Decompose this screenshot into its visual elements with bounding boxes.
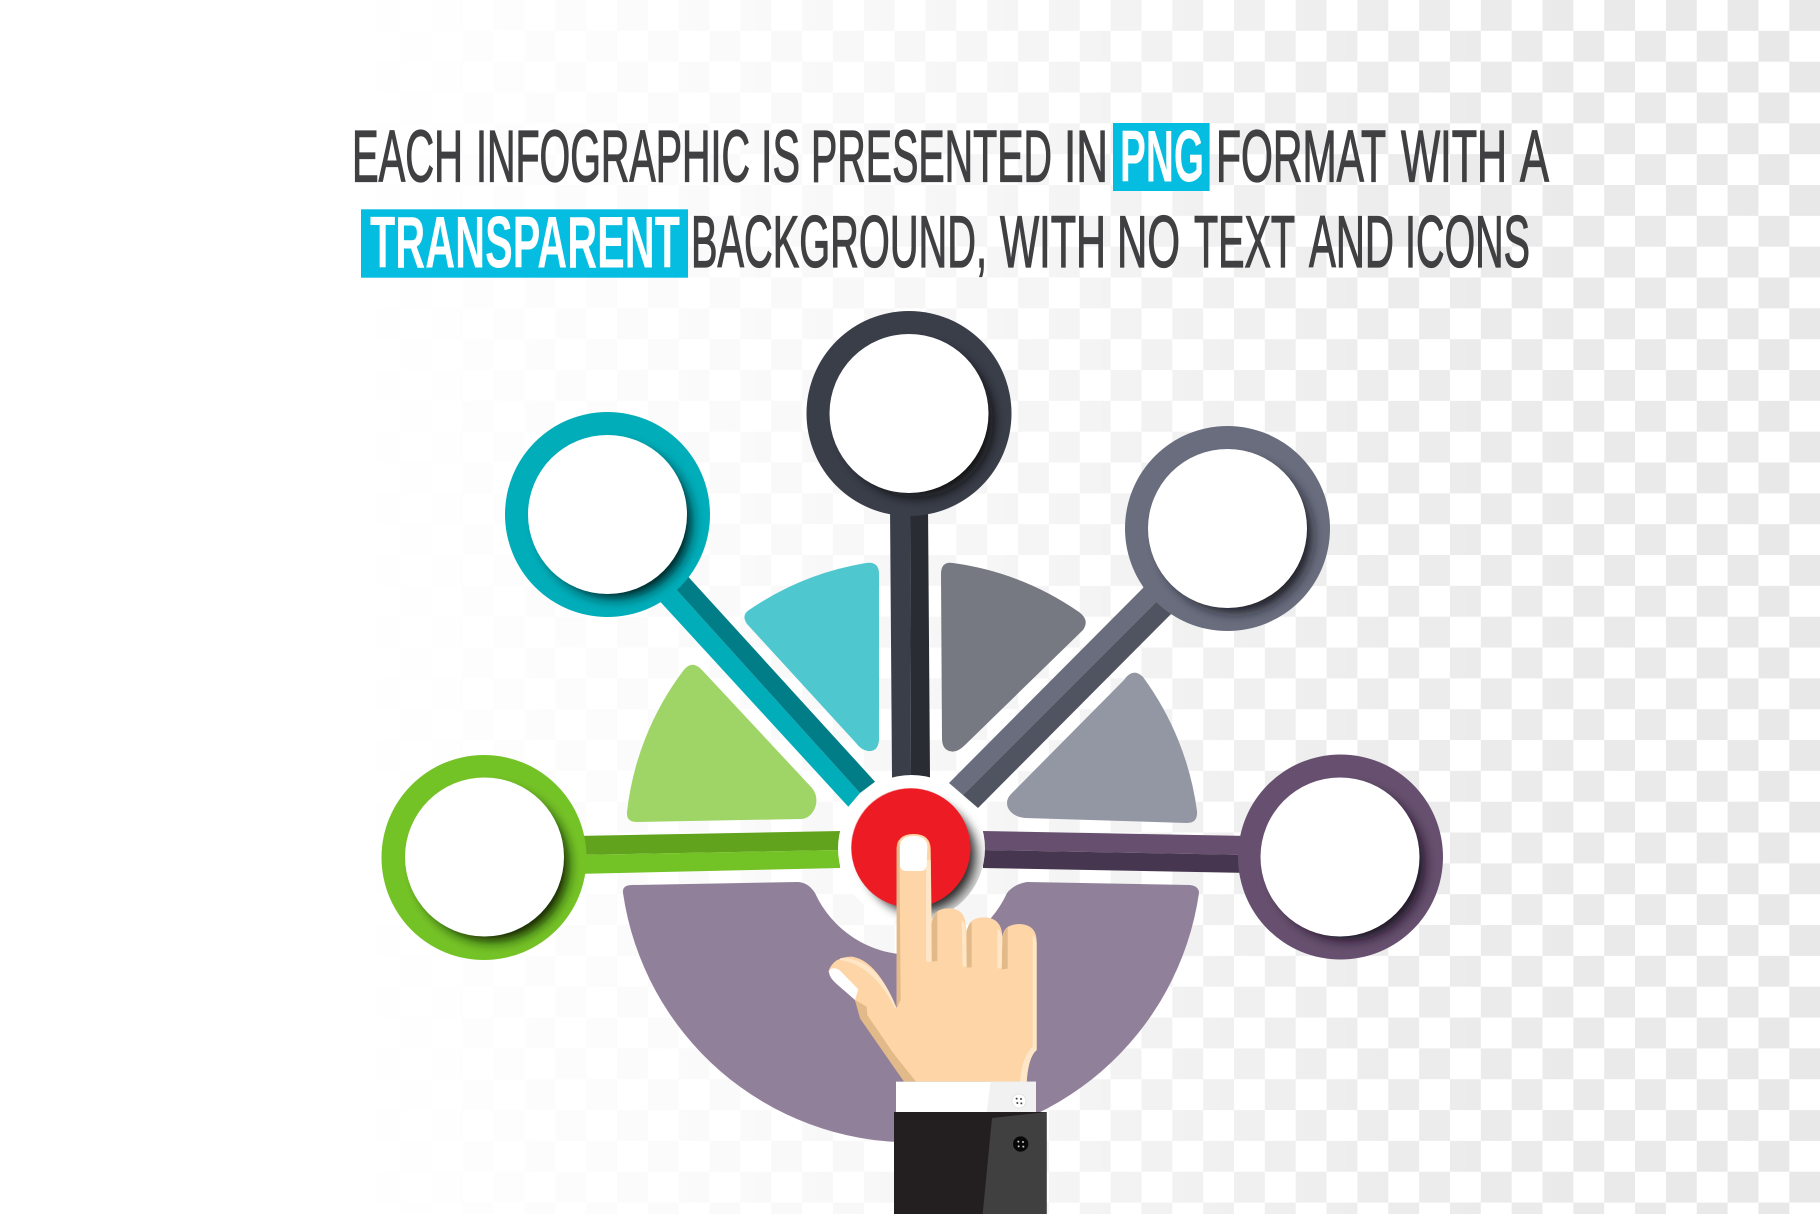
title: line one: PNG — [1120, 117, 1204, 198]
title: line two: ICONS — [1405, 202, 1530, 283]
hand: thumb nail — [829, 968, 858, 1000]
title: line two: TRANSPARENT — [370, 203, 680, 284]
title: line two: WITH — [1000, 202, 1106, 283]
connector: purple stem — [983, 831, 1250, 873]
node: grey circle — [1125, 426, 1330, 631]
connector: grey stem — [949, 581, 1177, 808]
connector: green stem — [575, 831, 840, 874]
jacket sleeve — [894, 1112, 1047, 1214]
connector: dark top stem — [890, 505, 930, 778]
title: line one: EACH — [352, 117, 463, 198]
title: line two — [361, 202, 1530, 284]
connector: teal stem — [655, 571, 875, 807]
hand: shaded finger edges — [855, 840, 1008, 1082]
petal: green segment — [627, 665, 816, 822]
title: line one: PRESENTED — [811, 117, 1052, 198]
petal: light grey segment — [1007, 673, 1197, 823]
node: dark top circle — [806, 311, 1012, 516]
node: green circle — [382, 755, 586, 960]
title: line one: INFOGRAPHIC — [476, 117, 750, 198]
petal: purple bottom segment — [623, 882, 1199, 1142]
title: line one: FORMAT — [1216, 117, 1386, 198]
title: line one: WITH — [1401, 117, 1507, 198]
title: line two: TEXT — [1194, 202, 1295, 283]
title: line one: A — [1520, 117, 1549, 198]
title: line two: AND — [1309, 202, 1394, 283]
title: line one: IN — [1064, 117, 1108, 198]
hand: highlights — [840, 860, 1037, 1082]
title: line two: NO — [1117, 202, 1180, 283]
shirt cuff — [896, 1082, 1036, 1112]
centre button: white ring and red disc — [838, 775, 985, 922]
hand: index finger nail — [900, 836, 927, 871]
title: line one — [352, 117, 1549, 198]
petal: dark grey segment — [941, 563, 1086, 752]
petal: teal segment — [744, 563, 879, 751]
title: line two: BACKGROUND, — [691, 202, 987, 283]
node: teal circle — [505, 412, 710, 617]
hand pressing the button — [828, 834, 1047, 1214]
title: line one: IS — [761, 117, 800, 198]
node: purple circle — [1238, 754, 1443, 960]
hand: palm and fingers — [828, 834, 1037, 1082]
